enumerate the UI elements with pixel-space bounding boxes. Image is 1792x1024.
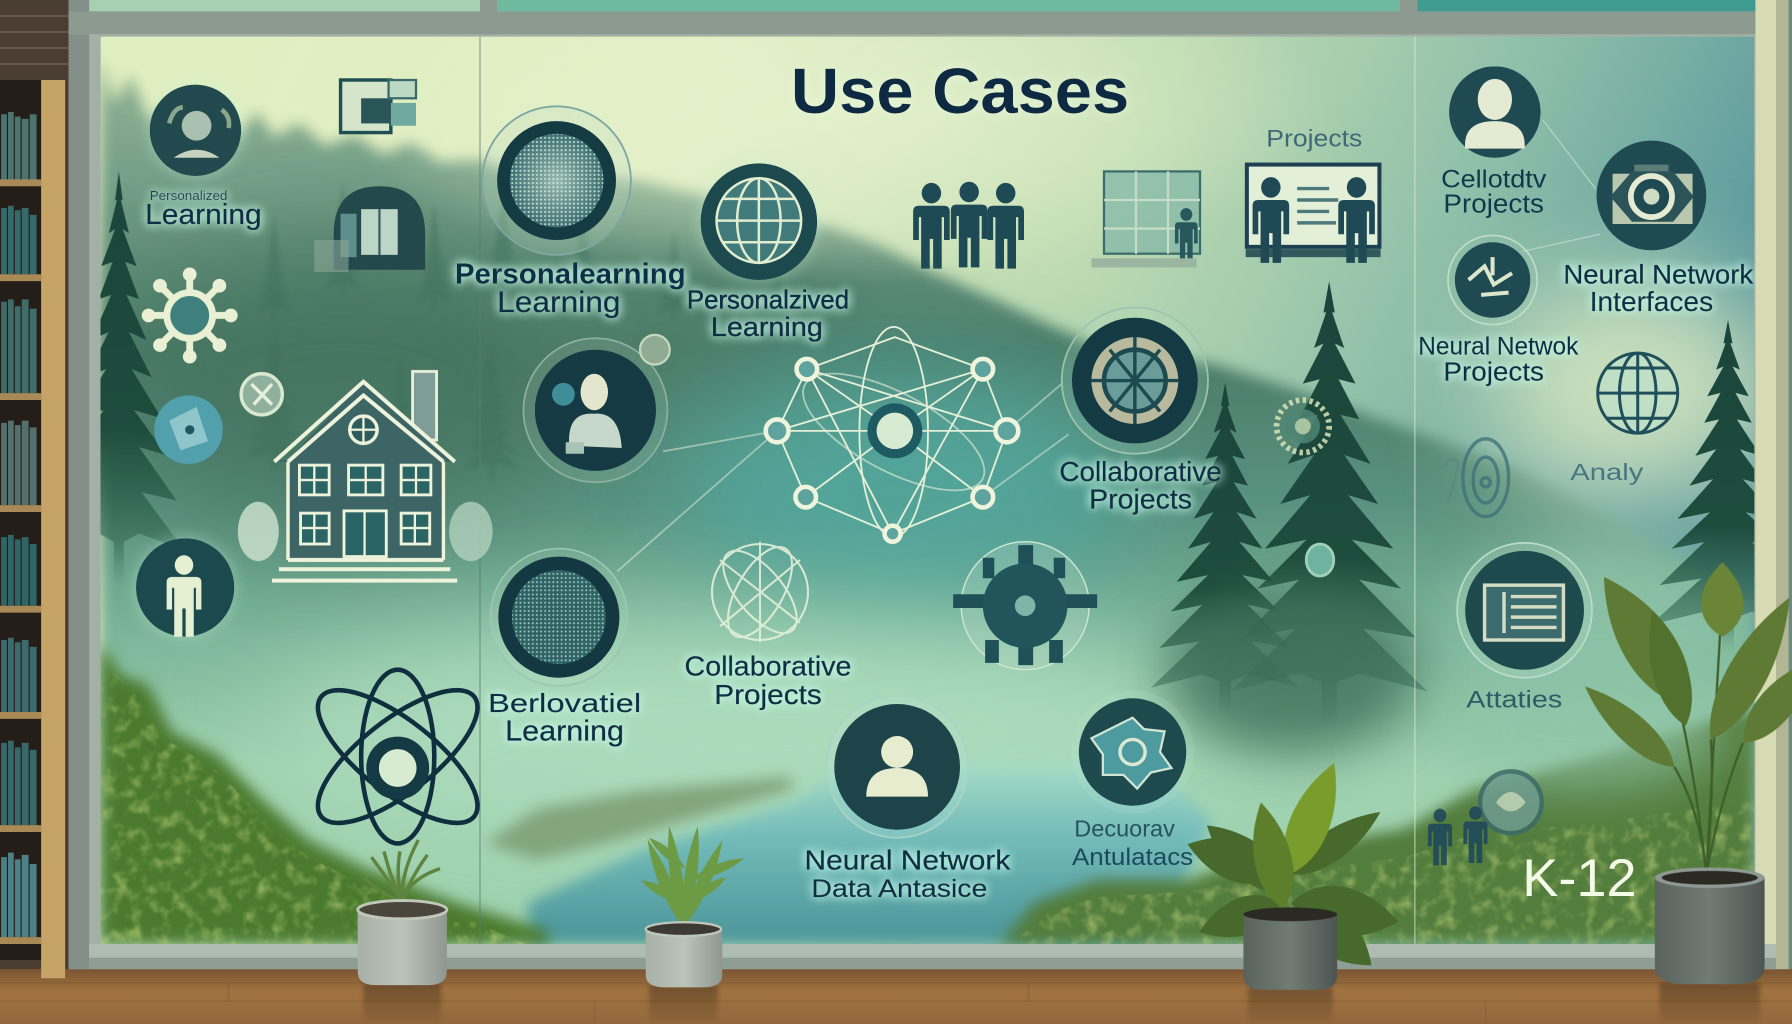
label: Cellotdtv projects: [1441, 165, 1547, 219]
icon: house: [238, 371, 493, 581]
label: Neural Network Projects: Projects: [1443, 359, 1544, 387]
glass seams: [480, 37, 1415, 944]
icon: small emblem: [241, 374, 282, 415]
label: Analy: Analy: [1570, 459, 1644, 485]
icon: atom: [299, 668, 497, 845]
icon: outline globe: [1598, 353, 1678, 433]
left foliage: [101, 642, 549, 944]
icon: round emblem lower right: [1480, 771, 1542, 833]
figures: two walkers: [1428, 806, 1487, 865]
icon: person badge lower centre: [826, 696, 968, 838]
label: Collaborative projects right: [1059, 456, 1222, 515]
label: Collaborative projects centre: Projects: [714, 679, 822, 710]
label: Behavioral learning: [488, 688, 641, 748]
icon: building sketch: [341, 80, 416, 133]
label: Collaborative projects centre: Collaborative: [685, 650, 851, 681]
label: Collaborative projects centre: [685, 650, 851, 710]
icon: eye camera badge: [1597, 141, 1706, 250]
label: Projects top: Projects: [1266, 125, 1362, 152]
connector lines right column: [1522, 120, 1600, 251]
far shore: [486, 777, 794, 859]
label: Personalized learning: [687, 285, 849, 342]
label: Personalized learning: Learning: [711, 312, 823, 342]
icon: spiral emblem: [1442, 439, 1509, 517]
books: [1, 112, 37, 937]
icon: sunflower emblem: [1277, 400, 1329, 453]
bookshelf: [0, 80, 65, 978]
label: Neural Network Projects: Neural Netwok: [1418, 332, 1579, 360]
plant: large right pot: [1575, 562, 1792, 984]
icon: virus gear: [142, 267, 238, 363]
label: Neural Network Interfaces: [1563, 259, 1754, 317]
central teal mist: [674, 366, 1131, 617]
plant: small pot: [639, 825, 746, 987]
icon: teal emblem: [154, 395, 223, 464]
icon: presenters at whiteboard: [1246, 165, 1381, 263]
pale valley mist: [263, 623, 1223, 840]
icon: student reading badge: [523, 335, 670, 482]
label: Personal learning: Personalearning: [455, 258, 686, 290]
label: Cellotdtv projects: Cellotdtv: [1441, 165, 1547, 193]
icon: collage panel with person: [1091, 171, 1200, 267]
label: Collaborative projects right: Collaborative: [1059, 456, 1222, 487]
river: [528, 763, 1211, 944]
diagram: neural network: [617, 327, 1069, 571]
icon: knot badge: [1071, 690, 1194, 814]
label: Personal learning: [455, 258, 686, 319]
label: Neural Network Data Analysis: Data Antasice: [811, 875, 987, 903]
icon: classroom dome: [314, 186, 425, 272]
label: Neural Network Data Analysis: Neural Network: [805, 845, 1011, 876]
icon: personal learning mesh sphere: [482, 106, 631, 255]
pale sky glow upper centre: [405, 36, 1270, 274]
label: K-12: K-12: [1522, 849, 1637, 908]
distant forested hillside: [101, 57, 1754, 944]
label: Decuorav Antulatacs: Antulatacs: [1072, 844, 1193, 871]
icon: collaborative emblem: [1062, 307, 1208, 454]
floor: [0, 969, 1792, 1024]
icon: student badge top left: [150, 85, 241, 176]
label: Neural Network Interfaces: Interfaces: [1590, 286, 1713, 317]
icon: three people: [913, 182, 1024, 269]
label: Personal learning: Learning: [497, 286, 621, 319]
icon: wireframe sphere: [710, 537, 810, 647]
icon: neural projects badge: [1448, 235, 1537, 325]
icon: dark gear emblem: [953, 542, 1097, 670]
label: Neural Network Projects: [1418, 332, 1579, 387]
label: Cellotdtv projects: Projects: [1443, 191, 1544, 219]
icon: person badge left: [136, 538, 234, 637]
label: Learning top left: Learning: [145, 199, 262, 231]
label: Behavioral learning: Learning: [505, 716, 624, 748]
right hill mist: [1451, 549, 1749, 686]
icon: person badge top right: [1449, 66, 1541, 158]
label: Personalized learning: Personalzived: [687, 285, 849, 315]
title: Use Cases: [791, 55, 1129, 127]
fir trees: [53, 171, 1792, 727]
label: Neural Network Interfaces: Neural Network: [1563, 259, 1754, 289]
icon: globe badge: [701, 163, 817, 280]
icon: small node marker: [1306, 544, 1334, 576]
plant: left pot: [358, 840, 447, 985]
wall behind bookshelf: [0, 0, 71, 971]
label: Behavioral learning: Berlovatiel: [488, 688, 641, 718]
icon: behavioral mesh sphere: [490, 549, 627, 686]
label: Neural Network Data Analysis: [805, 845, 1011, 903]
label: Decuorav Antulatacs: Decuorav: [1074, 816, 1175, 842]
label: Learning top left: Personalized: [150, 189, 227, 203]
icon: document badge: [1457, 543, 1592, 678]
forest mist under trees: [1166, 594, 1417, 754]
plant: centre-right pot: [1181, 756, 1403, 990]
label: Decuorav Antulatacs: [1072, 816, 1193, 871]
right foliage: [1000, 709, 1754, 944]
label: Collaborative projects right: Projects: [1089, 484, 1192, 515]
label: Attaties: Attaties: [1466, 686, 1562, 713]
